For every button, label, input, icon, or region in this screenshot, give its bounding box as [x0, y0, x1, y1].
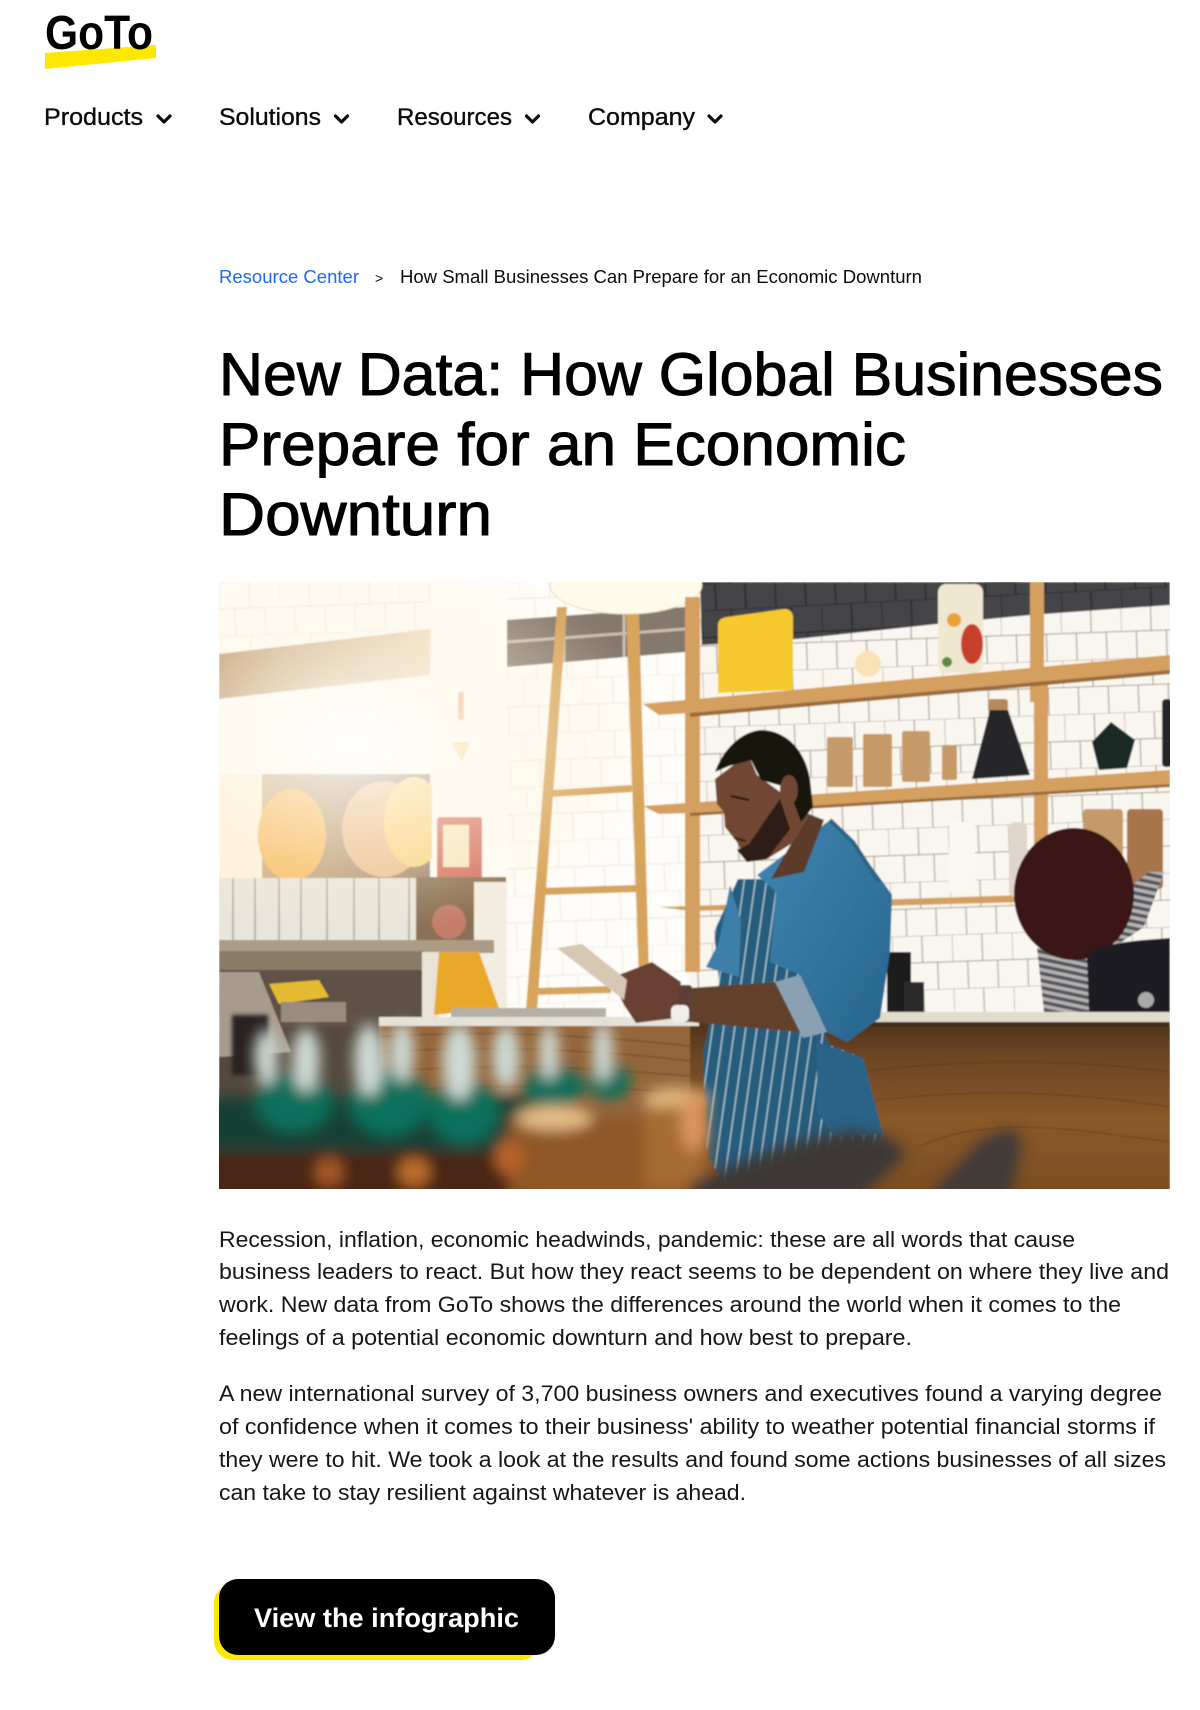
nav item: Products: Products [44, 104, 143, 131]
woman [1037, 948, 1099, 1012]
glasses and left counter [416, 877, 506, 942]
survey paragraph: A new international survey of 3,700 business owners and executives found a varying degree [219, 1381, 1162, 1406]
article intro paragraph: Recession, inflation, economic headwinds, pandemic: these are all words that cause [219, 1227, 1075, 1252]
survey paragraph: of confidence when it comes to their business' ability to weather potential financial storms if [219, 1414, 1156, 1439]
title [219, 341, 1163, 548]
navigation menu [44, 104, 721, 131]
button: View the infographic: View the infographic [254, 1603, 519, 1633]
shelf items [718, 609, 793, 693]
nav item: Resources: Resources [397, 104, 512, 131]
logo: GoTo: GoTo [45, 7, 153, 60]
ladder [526, 607, 650, 1010]
survey paragraph [219, 1381, 1166, 1505]
article intro paragraph [218, 1227, 1169, 1350]
barista [557, 730, 892, 1189]
nav item: Solutions: Solutions [219, 104, 321, 131]
photo: barista with tablet in a cafe [219, 582, 1170, 1189]
nav item: Company: Company [588, 104, 695, 131]
breadcrumb: How Small Businesses Can Prepare for an Economic Downturn [400, 266, 922, 287]
article intro paragraph: feelings of a potential economic downturn and how best to prepare. [219, 1325, 912, 1350]
survey paragraph: they were to hit. We took a look at the results and found some actions businesses of all sizes [219, 1447, 1166, 1472]
sun glare [219, 582, 1170, 1189]
foreground blur [232, 1015, 268, 1075]
button: View the infographic [214, 1579, 555, 1660]
title: Prepare for an Economic [219, 411, 906, 478]
article intro paragraph: work. New data from GoTo shows the differences around the world when it comes to the [218, 1292, 1121, 1317]
title: New Data: How Global Businesses [219, 341, 1163, 408]
title: Downturn [219, 481, 492, 548]
dark tile band [700, 582, 1170, 645]
walls [214, 577, 514, 1037]
breadcrumb: Resource Center [219, 266, 359, 287]
lamp [550, 556, 702, 614]
survey paragraph: can take to stay resilient against whatever is ahead. [219, 1480, 746, 1505]
counter [379, 1022, 690, 1192]
article intro paragraph: business leaders to react. But how they react seems to be dependent on where they live and [219, 1259, 1169, 1284]
shelves [643, 582, 1170, 972]
breadcrumb: > [375, 270, 383, 286]
